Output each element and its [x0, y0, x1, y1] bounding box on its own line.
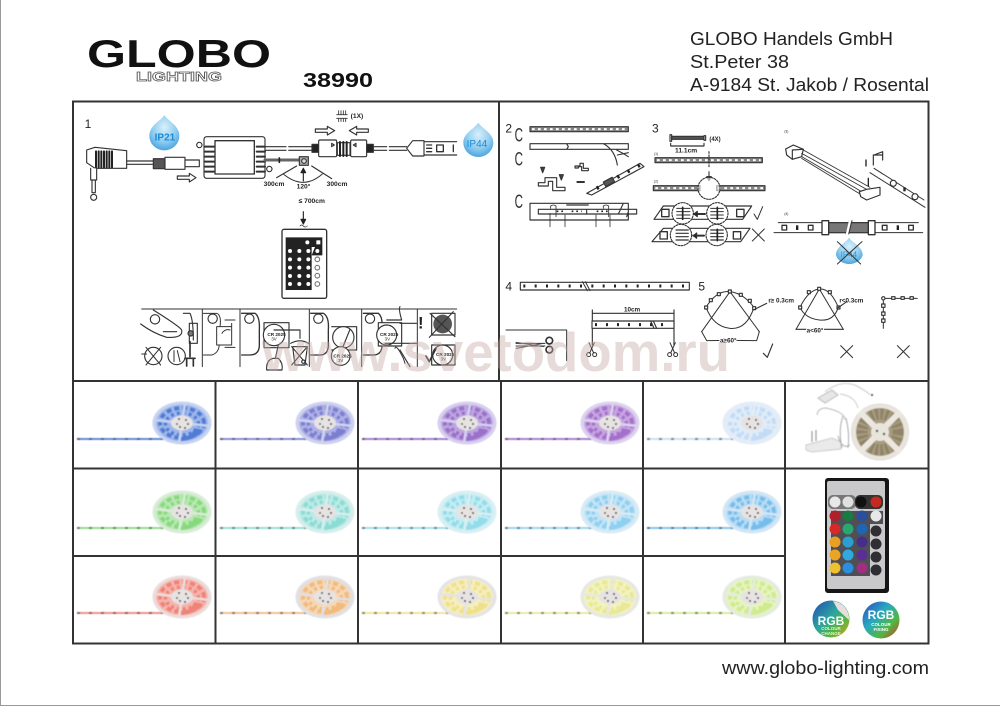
step 3 connector and strip joining: 3: [652, 121, 659, 135]
reel purple: [505, 402, 640, 444]
reel aqua: [220, 490, 354, 534]
strip with extension wire: (4): [784, 212, 788, 216]
sensor range diagram: 300cm: [327, 181, 347, 188]
step 5 bending: [698, 280, 917, 358]
step 3 connector and strip joining: (1): [654, 152, 658, 156]
battery step 4: [311, 313, 357, 365]
reel red: [77, 576, 212, 618]
icon: connector (1X): [337, 111, 363, 122]
battery replacement steps: [141, 307, 457, 370]
strip with extension wire: [774, 212, 923, 235]
step 2 mounting: C: [515, 192, 523, 213]
remote colour buttons: [830, 510, 883, 576]
icon: IP21 water drop: IP21: [155, 133, 176, 144]
battery step 4: CR 2025: [333, 353, 352, 358]
icon: crossed-out IP44 drop: IP44: [841, 251, 858, 260]
battery step 4: 3V: [338, 358, 343, 363]
website: www.globo-lighting.com: [721, 657, 929, 678]
sensor range diagram: ≤ 700cm: [299, 198, 325, 205]
product photo: strip, transformer and controller: [806, 384, 908, 460]
battery warning step: !: [418, 313, 424, 332]
IR sensor cable: [265, 157, 308, 165]
step 2 mounting: [505, 121, 644, 227]
badge: RGB colour fixing: RGB: [868, 608, 895, 622]
company address: St.Peter 38: [690, 51, 789, 72]
badge: RGB colour change: COLOUR: [821, 626, 841, 631]
logo: GLOBO Lighting: [87, 33, 271, 84]
step 2 mounting: C: [515, 150, 523, 171]
reel violet: [362, 402, 496, 444]
battery warning step: CR 2025: [436, 352, 455, 357]
icon: power plug: [87, 147, 199, 200]
reel light aqua: [362, 490, 496, 534]
company address: GLOBO Handels GmbH: [690, 28, 893, 49]
reel warm yellow: [362, 576, 496, 618]
step 4 cutting: [505, 280, 689, 361]
reel pale yellow: [505, 576, 640, 618]
connector fitting detail: [784, 130, 925, 207]
step number 1: 1: [85, 117, 92, 131]
step 3 connector and strip joining: (2): [654, 180, 658, 184]
step 3 connector and strip joining: [652, 121, 765, 246]
step 3 connector and strip joining: (4X): [709, 137, 721, 143]
sensor range diagram: 120°: [297, 183, 311, 191]
reel yellow-green: [647, 576, 782, 618]
panel: step 1 wiring diagram: [85, 111, 493, 370]
battery step 5: CR 2025: [380, 332, 399, 337]
battery warning step: 3V: [441, 357, 446, 362]
reel sky: [505, 490, 640, 534]
logo: GLOBO Lighting: LIGHTING: [136, 69, 222, 84]
reel blue: [77, 402, 212, 444]
icon: crossed-out IP44 drop: [836, 237, 863, 264]
company address: A-9184 St. Jakob / Rosental: [690, 74, 929, 95]
reel periwinkle: [220, 402, 354, 444]
step 2 mounting: 2: [505, 121, 512, 135]
controller box: [197, 137, 272, 178]
badge: RGB colour fixing: [862, 602, 900, 638]
grid frame: [73, 102, 928, 644]
remote control photo: [825, 478, 889, 593]
step 5 bending: 5: [698, 280, 705, 294]
battery step 3: [242, 313, 309, 370]
company address: [690, 28, 929, 95]
icon: IP21 water drop: [149, 115, 179, 150]
battery step 5: 3V: [385, 337, 390, 342]
battery warning step: [418, 312, 455, 365]
badge: RGB colour fixing: FIXING: [873, 627, 889, 632]
battery step 1: [141, 310, 197, 366]
step 5 bending: r≥ 0.3cm: [768, 297, 794, 304]
battery step 3: 3V: [271, 337, 277, 342]
connector fitting detail: (3): [784, 130, 788, 134]
badge: RGB colour change: [812, 600, 850, 638]
step 5 bending: a<60°: [807, 327, 824, 335]
model number: 38990: [303, 70, 373, 92]
battery step 5: [363, 307, 417, 367]
logo: GLOBO Lighting: GLOBO: [87, 33, 271, 76]
reel light blue: [647, 490, 782, 534]
reel white-blue: [647, 402, 782, 444]
cable to strip connector: [265, 140, 457, 157]
arrows: join connector: [315, 126, 368, 135]
remote control outline: [282, 229, 327, 298]
badge: RGB colour change: RGB: [818, 614, 845, 628]
step 4 cutting: 10cm: [624, 306, 641, 313]
sensor range diagram: 300cm: [264, 181, 284, 188]
battery step 2: [203, 313, 235, 355]
icon: IP44 water drop: IP44: [467, 139, 488, 150]
arrow: plug in: [177, 173, 196, 182]
step 5 bending: r<0.3cm: [839, 297, 864, 304]
reel orange: [220, 576, 354, 618]
badge: RGB colour fixing: COLOUR: [871, 622, 891, 627]
watermark: www.svetodom.ru: [261, 321, 730, 383]
badge: RGB colour change: CHANGE: [821, 631, 841, 636]
remote top buttons: [828, 495, 883, 509]
step 4 cutting: 4: [505, 280, 512, 294]
battery step 3: CR 2025: [267, 332, 286, 337]
step 2 mounting: C: [515, 126, 523, 146]
reel green: [77, 490, 212, 534]
panel: colour reel grid: [77, 402, 782, 618]
step 5 bending: a≥60°: [720, 337, 737, 345]
step 3 connector and strip joining: 11.1cm: [675, 148, 697, 155]
icon: IP44 water drop: [463, 123, 493, 157]
panel: steps 2 to 5 mounting diagrams: [505, 121, 925, 361]
icon: connector (1X): (1X): [351, 113, 363, 120]
sensor range diagram: [264, 166, 347, 227]
